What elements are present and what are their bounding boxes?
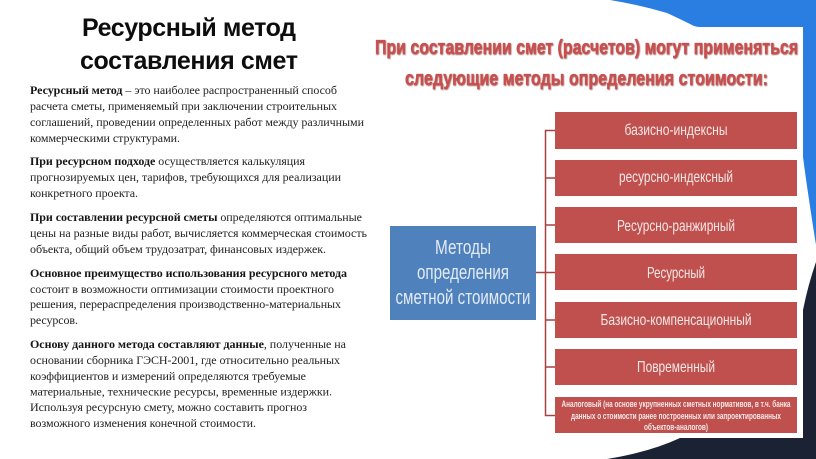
paragraph: main advantage: решения, перераспределения производственно-материальных bbox=[30, 297, 341, 311]
method box: базисно-индексны bbox=[555, 112, 797, 149]
blue box: methods: определения bbox=[417, 261, 509, 284]
paragraph: definition: коммерческими структурами. bbox=[30, 131, 180, 145]
method box: Повременный bbox=[555, 349, 797, 385]
method box: Аналоговый: объектов-аналогов) bbox=[644, 422, 708, 432]
paragraph: resource approach: прогнозируемых цен, тарифов, требующихся для реализации bbox=[30, 170, 342, 184]
paragraph: definition bbox=[30, 83, 365, 145]
method box: Ресурсный bbox=[555, 254, 797, 290]
paragraph: resource estimate: При составлении ресурсной сметы определяются оптимальные bbox=[30, 210, 362, 224]
paragraph: resource approach: конкретного проекта. bbox=[30, 186, 138, 200]
title: составления смет bbox=[80, 47, 298, 75]
method box: Базисно-компенсационный: Базисно-компенсационный bbox=[600, 312, 752, 329]
paragraph: data basis: возможного изменения конечной стоимости. bbox=[30, 416, 256, 430]
blue box: methods: сметной стоимости bbox=[396, 286, 530, 309]
paragraph: definition: Ресурсный метод – это наиболее распространенный способ bbox=[30, 83, 337, 97]
paragraph: main advantage: ресурсов. bbox=[30, 313, 78, 327]
paragraph: main advantage: Основное преимущество использования ресурсного метода bbox=[30, 266, 347, 280]
title: Ресурсный метод bbox=[82, 14, 296, 42]
paragraph: data basis: коэффициентов и измерений определяются требуемые bbox=[30, 369, 306, 383]
paragraph: main advantage bbox=[30, 266, 347, 327]
method box: Ресурсный: Ресурсный bbox=[647, 265, 705, 282]
paragraph: resource estimate: цены на разные виды работ, вычисляется коммерческая стоимость bbox=[30, 226, 368, 240]
method box: Повременный: Повременный bbox=[637, 359, 715, 376]
method box: Базисно-компенсационный bbox=[555, 302, 797, 338]
paragraph: data basis: Основу данного метода составляют данные, полученные на bbox=[30, 337, 347, 351]
paragraph: resource approach: При ресурсном подходе осуществляется калькуляция bbox=[30, 154, 305, 168]
background shape: dark corner bbox=[607, 262, 816, 459]
paragraph: definition: расчета сметы, применяемый при заключении строительных bbox=[30, 99, 337, 113]
connector lines bbox=[536, 130, 555, 416]
title bbox=[80, 14, 298, 75]
method box: базисно-индексны: базисно-индексны bbox=[624, 122, 728, 139]
method box: Ресурсно-ранжирный bbox=[555, 207, 797, 243]
red heading bbox=[375, 37, 798, 90]
paragraph: data basis bbox=[30, 337, 347, 430]
paragraph: data basis: Используя ресурсную смету, можно составить прогноз bbox=[30, 400, 307, 414]
method box: ресурсно-индексный bbox=[555, 160, 797, 196]
background shape: blue corner bbox=[610, 0, 816, 245]
paragraph: data basis: основании сборника ГЭСН-2001, где относительно реальных bbox=[30, 353, 340, 367]
method box: Ресурсно-ранжирный: Ресурсно-ранжирный bbox=[617, 218, 735, 235]
body text bbox=[30, 83, 368, 430]
blue box: methods bbox=[390, 226, 536, 320]
paragraph: resource estimate: объекта, общий объем трудозатрат, финансовых издержек. bbox=[30, 242, 326, 256]
method box: ресурсно-индексный: ресурсно-индексный bbox=[619, 169, 733, 186]
paragraph: data basis: материальные, технические ресурсы, временные издержки. bbox=[30, 384, 332, 398]
paragraph: resource estimate bbox=[30, 210, 368, 256]
method box: Аналоговый bbox=[555, 397, 797, 433]
paragraph: main advantage: состоит в возможности оптимизации стоимости проектного bbox=[30, 282, 334, 296]
paragraph: definition: соглашений, проведении определенных работ между различными bbox=[30, 115, 365, 129]
paragraph: resource approach bbox=[30, 154, 342, 200]
blue box: methods: Методы bbox=[435, 236, 491, 259]
